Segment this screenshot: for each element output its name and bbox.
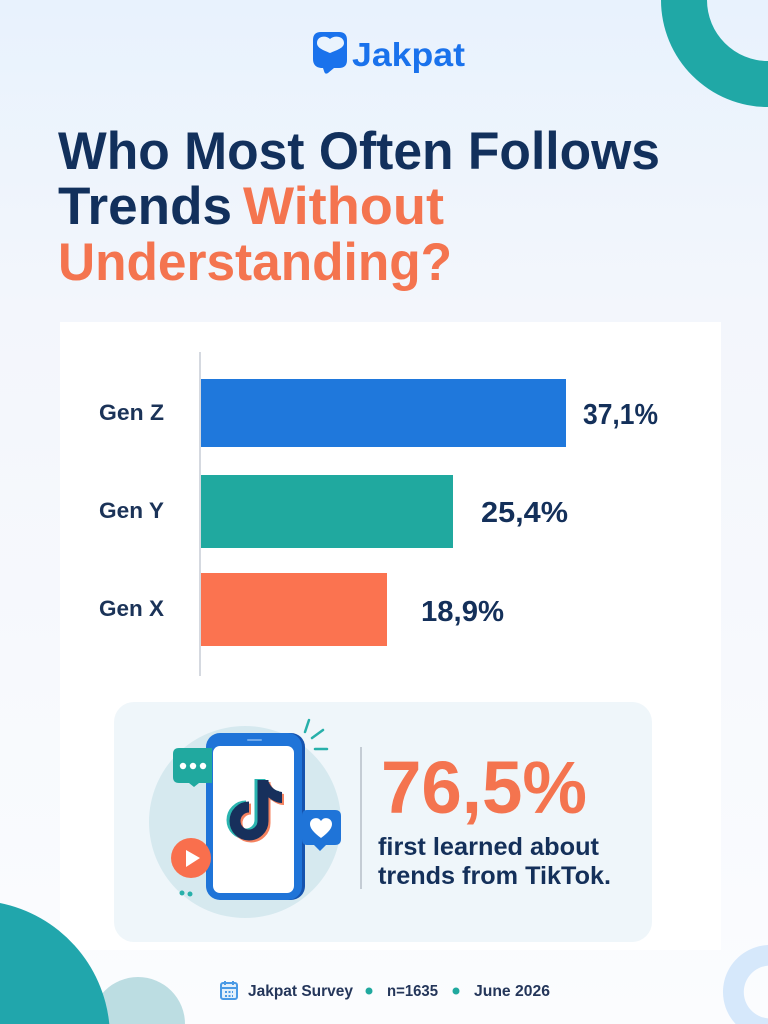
panel: chart bbox=[60, 322, 721, 950]
big number: 76,5% bbox=[381, 746, 587, 829]
bar: Gen Y bbox=[99, 475, 568, 548]
bar: Gen Z: Gen Z bbox=[99, 400, 164, 425]
bar: Gen X: Gen X bbox=[99, 596, 164, 621]
title: Who Most Often Follows bbox=[58, 122, 660, 181]
icon: speech bubble heart bbox=[313, 32, 347, 74]
decorative ring: bottom right bbox=[723, 945, 768, 1024]
decorative circles: bottom left bbox=[0, 903, 185, 1024]
callout: TikTok stat bbox=[114, 702, 652, 942]
icon: TikTok note bbox=[232, 779, 284, 837]
icon: calendar bbox=[221, 981, 237, 999]
footer text: June 2026 bbox=[474, 983, 550, 1000]
bar: Gen Y: Gen Y bbox=[99, 498, 164, 523]
callout text: trends from TikTok. bbox=[378, 862, 611, 890]
footer text: Jakpat Survey bbox=[248, 983, 353, 1000]
callout text: first learned about bbox=[378, 833, 600, 861]
icon: phone with TikTok logo bbox=[149, 720, 341, 918]
icon: chat bubble bbox=[173, 748, 212, 787]
bar: Gen Z bbox=[99, 379, 658, 447]
title bbox=[58, 122, 660, 292]
footer text bbox=[248, 983, 550, 1000]
icon: heart bubble bbox=[302, 810, 341, 851]
bar: Gen Y: 25,4% bbox=[481, 497, 568, 529]
bar chart bbox=[99, 352, 658, 676]
bar: Gen Z: 37,1% bbox=[583, 399, 658, 431]
footer text: n=1635 bbox=[387, 983, 438, 1000]
bar: Gen X bbox=[99, 573, 504, 646]
title: Understanding? bbox=[58, 233, 452, 292]
sparkle lines bbox=[305, 720, 327, 749]
logo: Jakpat bbox=[313, 32, 465, 74]
title: Without bbox=[243, 177, 444, 236]
bar: Gen X: 18,9% bbox=[421, 596, 504, 628]
logo wordmark: Jakpat bbox=[352, 36, 465, 73]
callout text bbox=[378, 833, 611, 890]
title: Trends bbox=[58, 177, 232, 236]
decorative ring: top right bbox=[661, 0, 768, 107]
icon: play button bbox=[171, 838, 211, 878]
footer bbox=[221, 981, 550, 1000]
